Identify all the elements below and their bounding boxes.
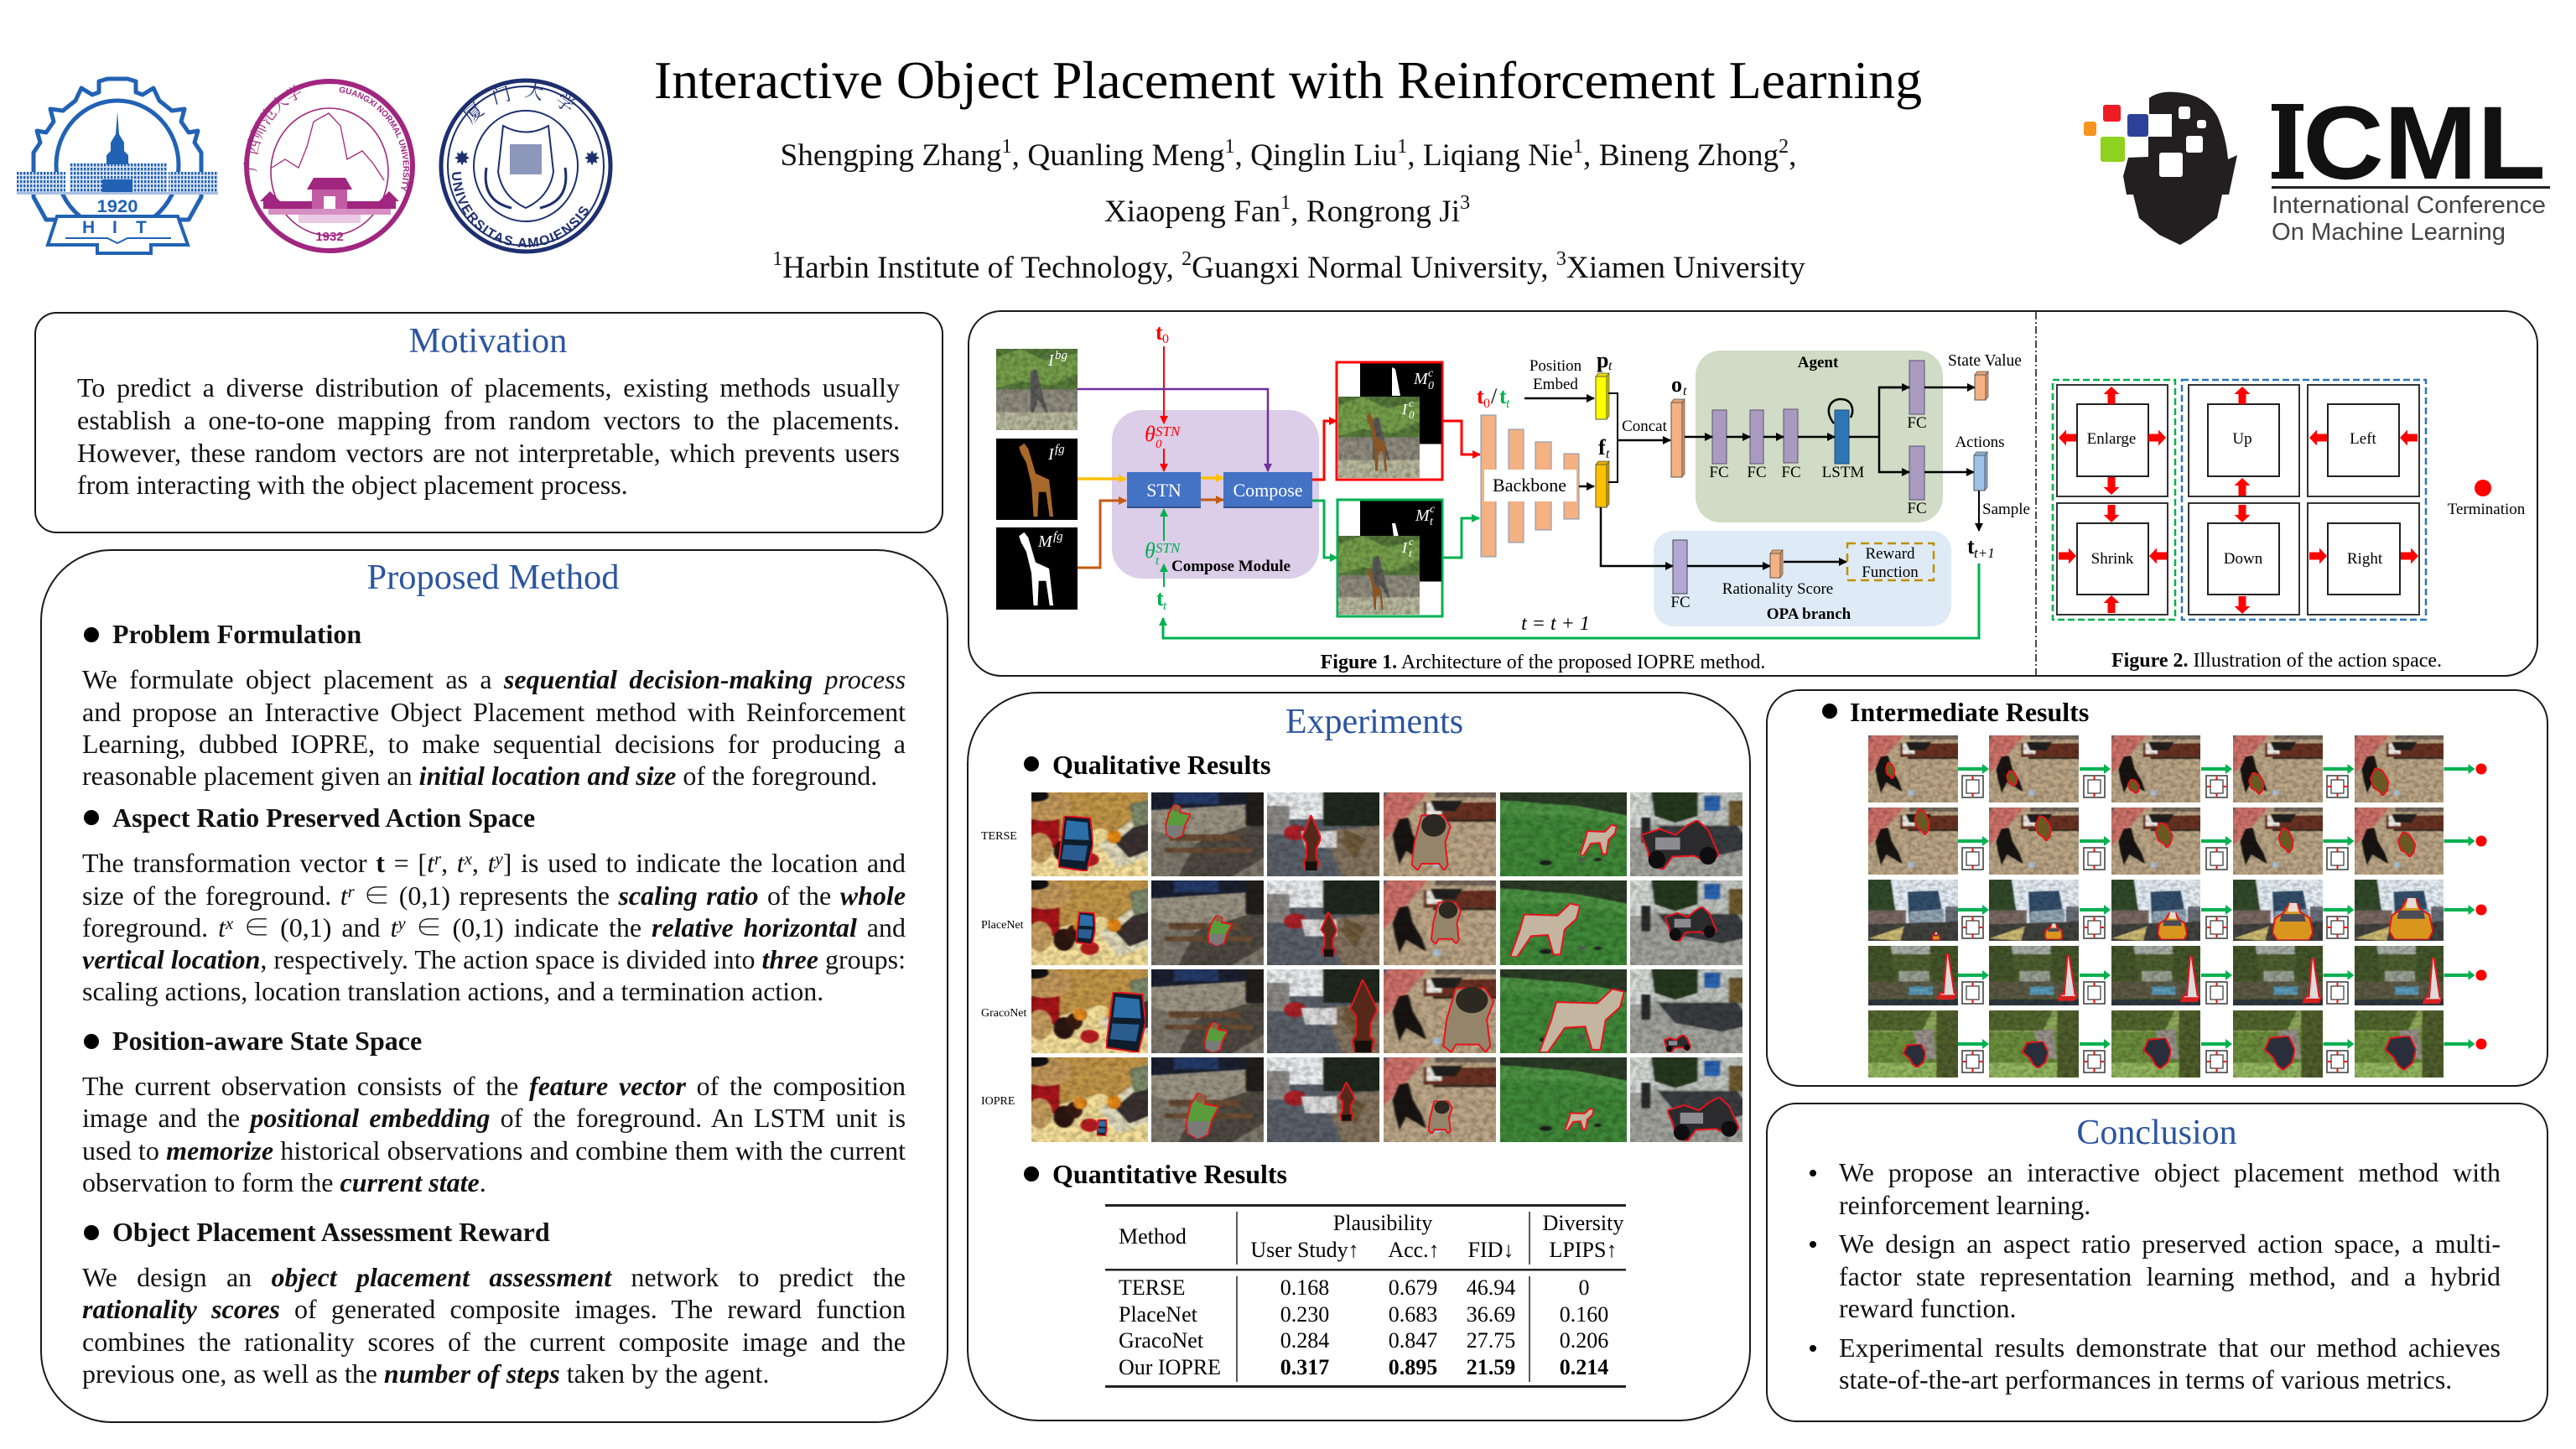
panel: proposed method bbox=[40, 549, 948, 1423]
label: t0/tt: t bbox=[1499, 384, 1507, 408]
affiliations: Xiamen University bbox=[1566, 251, 1805, 285]
text block: problem formulation: reasonable placement given an initial location and size of the foreground. bbox=[82, 760, 877, 790]
logo: Guangxi Normal University: 1932 bbox=[315, 230, 344, 244]
scaling actions group bbox=[2053, 380, 2175, 620]
arrow: mask to STN bbox=[1078, 501, 1126, 568]
composite: initial (red box): c bbox=[1428, 367, 1434, 380]
logo: Xiamen University: 厦门大学 bbox=[463, 83, 575, 124]
logo: ICML bbox=[2084, 86, 2550, 246]
table: quantitative results: 21.59 bbox=[1467, 1355, 1515, 1379]
affiliations: 3 bbox=[1556, 248, 1566, 270]
row labels: PlaceNet bbox=[981, 919, 1024, 932]
table: quantitative results: GracoNet bbox=[1119, 1328, 1204, 1353]
subheading: quantitative results: Quantitative Results bbox=[1052, 1159, 1287, 1189]
panel: figures bbox=[968, 310, 2538, 677]
label: t0/tt: 0 bbox=[1483, 397, 1490, 411]
action: enlarge bbox=[2057, 385, 2168, 496]
arrow: theta t to STN bbox=[1163, 509, 1165, 541]
arrow: STN to Compose orange bbox=[1201, 498, 1223, 501]
text block: conclusion bullet 3: state-of-the-art performances in terms of various metrics. bbox=[1839, 1364, 2452, 1394]
text block: reward: previous one, as well as the number of steps taken by the agent. bbox=[82, 1358, 769, 1389]
output: state value: State Value bbox=[1948, 352, 2022, 370]
qualitative results image grid bbox=[1019, 784, 1753, 1150]
logo: ICML: On Machine Learning bbox=[2272, 219, 2506, 246]
table: quantitative results: LPIPS↑ bbox=[1550, 1238, 1617, 1262]
table: quantitative results: 0.683 bbox=[1389, 1302, 1437, 1327]
authors line 2: Xiaopeng Fan bbox=[1104, 195, 1280, 229]
arrow: initial composite to backbone bbox=[1442, 421, 1480, 454]
label: theta t STN: t bbox=[1156, 554, 1160, 568]
logo: Xiamen University: UNIVERSITAS AMOIENSIS bbox=[452, 172, 589, 248]
label: agent: Agent bbox=[1798, 354, 1839, 371]
action: shrink bbox=[2057, 503, 2168, 615]
agent background bbox=[1696, 351, 1943, 522]
feature bar: ft bbox=[1596, 461, 1609, 507]
text block: state space: used to memorize historical observations and combine them with the current bbox=[82, 1135, 906, 1166]
intermediate row 1 bbox=[1859, 729, 2487, 809]
agent layer labels: FC bbox=[1907, 500, 1927, 517]
label: t0: 0 bbox=[1162, 332, 1169, 346]
LSTM block bbox=[1835, 410, 1849, 464]
arrow: ft to OPA bbox=[1601, 507, 1673, 566]
label: theta0 STN: 0 bbox=[1156, 438, 1162, 451]
table: quantitative results: 36.69 bbox=[1467, 1302, 1515, 1327]
label: compose module: Compose Module bbox=[1171, 558, 1291, 575]
table: quantitative results: Method bbox=[1119, 1224, 1187, 1249]
composite: current (green box): t bbox=[1409, 547, 1412, 559]
backbone network: Backbone bbox=[1493, 475, 1566, 496]
block: STN: STN bbox=[1146, 480, 1182, 501]
label: t t+1 bbox=[1967, 534, 1995, 561]
caption: figure 1: Figure 1. Architecture of the proposed IOPRE method. bbox=[1321, 652, 1765, 673]
text block: action space: vertical location, respectively. The action space is divided into three groups: bbox=[82, 944, 906, 974]
arrow: position to pt bbox=[1524, 397, 1594, 399]
logo: Harbin Institute of Technology: H bbox=[82, 218, 95, 237]
label: position embed: Position bbox=[1530, 357, 1582, 375]
OPA branch background bbox=[1654, 531, 1951, 626]
row labels: IOPRE bbox=[981, 1095, 1015, 1108]
text block: problem formulation: and propose an Interactive Object Placement method with Reinforcement bbox=[82, 696, 906, 726]
table: quantitative results: 27.75 bbox=[1467, 1328, 1515, 1353]
label: theta0 STN bbox=[1145, 422, 1182, 451]
logo: Harbin Institute of Technology bbox=[17, 79, 218, 253]
table: quantitative results: 0.284 bbox=[1280, 1328, 1329, 1353]
table: quantitative results: TERSE bbox=[1119, 1275, 1185, 1300]
intermediate row 2 bbox=[1859, 801, 2487, 881]
text block: reward bbox=[82, 1262, 906, 1389]
label: sample: Sample bbox=[1982, 501, 2030, 518]
label: ft: t bbox=[1606, 447, 1610, 461]
affiliations: Guangxi Normal University, bbox=[1192, 251, 1556, 285]
label: tt bbox=[1156, 586, 1167, 613]
row labels bbox=[981, 830, 1027, 1108]
text block: conclusion bullet 1: reinforcement learning. bbox=[1839, 1190, 2090, 1220]
text block: problem formulation bbox=[82, 664, 906, 791]
authors line 2: 3 bbox=[1460, 192, 1470, 214]
agent layer labels: FC bbox=[1747, 464, 1767, 481]
text block: action space: foreground. tx ∈ (0,1) and ty ∈ (0,1) indicate the relative horizontal and bbox=[82, 912, 906, 943]
text block: problem formulation: Learning, dubbed IOPRE, to make sequential decisions for producing a bbox=[82, 728, 906, 758]
composite: current (green box) bbox=[1330, 500, 1442, 622]
arrow: score to reward bbox=[1784, 561, 1846, 563]
logo: Guangxi Normal University: 广西师范大学 bbox=[243, 85, 301, 172]
logo: Harbin Institute of Technology: 1920 bbox=[97, 197, 138, 216]
authors line 1: 1 bbox=[1002, 136, 1012, 158]
arrow: t0 to theta0 bbox=[1163, 346, 1165, 423]
text block: reward: rationality scores of generated composite images. The reward function bbox=[82, 1294, 906, 1324]
output: state value bbox=[1948, 352, 2022, 400]
intermediate row 4 bbox=[1859, 940, 2487, 1011]
table: quantitative results: 46.94 bbox=[1467, 1275, 1515, 1300]
authors line 1: , Liqiang Nie bbox=[1407, 138, 1573, 173]
text block: state space: image and the positional embedding of the foreground. An LSTM unit is bbox=[82, 1103, 906, 1133]
label: position embed bbox=[1530, 357, 1582, 393]
arrow: foreground to STN bbox=[1078, 477, 1126, 480]
label: t0/tt: / bbox=[1491, 384, 1498, 408]
table: quantitative results: PlaceNet bbox=[1119, 1302, 1198, 1327]
composite: initial (red box) bbox=[1330, 362, 1442, 486]
table: quantitative results: 0.206 bbox=[1560, 1328, 1608, 1353]
label: t0: t bbox=[1156, 320, 1163, 345]
action: right: Right bbox=[2347, 550, 2383, 568]
table: quantitative results: 0.317 bbox=[1280, 1355, 1329, 1379]
arrow: compose to current composite bbox=[1312, 501, 1337, 558]
header: logos, title, authors bbox=[17, 50, 2550, 285]
label: ot bbox=[1671, 372, 1687, 398]
panel: intermediate results bbox=[1766, 689, 2548, 1087]
reward function box: Function bbox=[1862, 564, 1919, 581]
logo: Harbin Institute of Technology: I bbox=[112, 218, 117, 237]
authors line 1: , Bineng Zhong bbox=[1583, 138, 1779, 173]
panel: experiments bbox=[967, 692, 1751, 1421]
table: quantitative results: 0.847 bbox=[1389, 1328, 1437, 1353]
action: shrink: Shrink bbox=[2091, 550, 2134, 568]
panel: motivation bbox=[34, 312, 943, 533]
arrow: actions to next transform bbox=[1978, 491, 1980, 531]
text block: motivation body: establish a one-to-one mapping from random vectors to the placements. bbox=[77, 405, 900, 435]
input image: foreground mask: M bbox=[1037, 532, 1053, 551]
label: theta0 STN: STN bbox=[1156, 423, 1182, 439]
action: termination: Termination bbox=[2448, 501, 2526, 518]
output: actions: Actions bbox=[1955, 434, 2005, 451]
label: t0/tt bbox=[1477, 384, 1510, 411]
agent layer labels: FC bbox=[1781, 464, 1801, 481]
label: ft bbox=[1598, 435, 1610, 461]
logo: ICML: ICML bbox=[2272, 86, 2546, 201]
title: Interactive Object Placement with Reinforcement Learning bbox=[654, 50, 1922, 110]
agent layer labels bbox=[1709, 414, 1927, 517]
agent arrows bbox=[1685, 387, 1975, 472]
logo: ICML: International Conference bbox=[2272, 192, 2546, 219]
label: theta t STN bbox=[1145, 538, 1182, 568]
authors line 1: 1 bbox=[1224, 136, 1234, 158]
arrow: FC to score bbox=[1687, 565, 1770, 567]
composite: initial (red box): 0 bbox=[1409, 408, 1415, 421]
text block: state space: observation to form the current state. bbox=[82, 1167, 486, 1197]
table: quantitative results bbox=[1105, 1204, 1626, 1388]
logo: Guangxi Normal University: GUANGXI NORMAL UNIVERSITY bbox=[339, 87, 409, 191]
label: t = t + 1: t = t + 1 bbox=[1521, 613, 1590, 635]
FC layers in agent bbox=[1712, 361, 1924, 500]
arrow: background to compose bbox=[1078, 389, 1268, 471]
text block: problem formulation: We formulate object placement as a sequential decision-making process bbox=[82, 664, 906, 694]
authors line 2: 1 bbox=[1280, 192, 1291, 214]
action: down bbox=[2189, 503, 2299, 615]
input image: foreground bbox=[996, 439, 1078, 520]
input image: foreground: fg bbox=[1055, 443, 1065, 456]
logo: Xiamen University: ✸ bbox=[584, 148, 600, 170]
figure 2: action space bbox=[2053, 380, 2526, 620]
panel: conclusion bbox=[1766, 1103, 2548, 1422]
label: concat: Concat bbox=[1622, 418, 1668, 435]
label: t t+1: t bbox=[1967, 534, 1975, 558]
table: quantitative results: 0.895 bbox=[1389, 1355, 1437, 1379]
text block: motivation body bbox=[77, 372, 900, 500]
table: quantitative results: FID↓ bbox=[1468, 1238, 1514, 1262]
authors line 1: , Quanling Meng bbox=[1012, 138, 1224, 173]
authors line 1: , bbox=[1789, 138, 1796, 173]
label: t0/tt: t bbox=[1506, 397, 1510, 411]
composite: current (green box): M bbox=[1415, 506, 1431, 525]
OPA FC layer bbox=[1670, 540, 1690, 611]
OPA FC layer: FC bbox=[1670, 594, 1690, 611]
label: pt: t bbox=[1608, 359, 1613, 373]
table: quantitative results: User Study↑ bbox=[1250, 1238, 1359, 1262]
logo: Guangxi Normal University bbox=[243, 79, 415, 253]
table: quantitative results: Plausibility bbox=[1333, 1211, 1432, 1235]
label: t t+1: t+1 bbox=[1974, 545, 1995, 561]
affiliations: 2 bbox=[1182, 248, 1192, 270]
arrow: current composite to backbone bbox=[1442, 518, 1479, 558]
text block: conclusion bullet 2: We design an aspect ratio preserved action space, a multi- bbox=[1839, 1228, 2501, 1259]
LSTM recurrent loop bbox=[1829, 399, 1852, 423]
heading: motivation: Motivation bbox=[409, 321, 567, 361]
connector: pt and ft to concat bbox=[1608, 393, 1618, 482]
action: left bbox=[2308, 385, 2419, 496]
input image: background bbox=[988, 340, 1086, 439]
label: OPA branch: OPA branch bbox=[1767, 605, 1852, 623]
authors line 1: Shengping Zhang bbox=[781, 138, 1002, 173]
arrow: concat bbox=[1618, 439, 1670, 441]
arrow: t+1 feedback loop bbox=[1163, 564, 1979, 638]
label: tt: t bbox=[1156, 586, 1164, 610]
text block: action space: The transformation vector t = [tr, tx, ty] is used to indicate the location and bbox=[82, 848, 906, 878]
input image: background: bg bbox=[1055, 349, 1068, 362]
arrow: theta0 to STN bbox=[1163, 449, 1165, 471]
figure 1: architecture diagram bbox=[988, 320, 2030, 638]
row labels: TERSE bbox=[981, 830, 1017, 843]
text block: action space: size of the foreground. tr ∈ (0,1) represents the scaling ratio of the whole bbox=[82, 880, 906, 911]
agent layer labels: FC bbox=[1907, 414, 1927, 432]
label: theta t STN: θ bbox=[1145, 538, 1156, 563]
arrow: compose to initial composite bbox=[1312, 421, 1337, 480]
block: Compose bbox=[1223, 472, 1312, 508]
subheading: object placement assessment reward: Object Placement Assessment Reward bbox=[112, 1216, 550, 1246]
text block: state space: The current observation consists of the feature vector of the composition bbox=[82, 1071, 906, 1101]
text block: conclusion bullet 1: We propose an interactive object placement method with bbox=[1839, 1157, 2501, 1187]
composite: current (green box): I bbox=[1401, 539, 1408, 556]
text block: motivation body: However, these random vectors are not interpretable, which prevents users bbox=[77, 438, 900, 468]
backbone network bbox=[1481, 415, 1579, 557]
row TERSE images bbox=[1019, 784, 1753, 885]
composite: initial (red box): c bbox=[1409, 397, 1414, 409]
authors line 1: , Qinglin Liu bbox=[1234, 138, 1398, 173]
text block: reward: We design an object placement assessment network to predict the bbox=[82, 1262, 906, 1292]
affiliations: Harbin Institute of Technology, bbox=[782, 251, 1182, 285]
label: tt: t bbox=[1163, 600, 1167, 613]
composite: current (green box): c bbox=[1409, 535, 1414, 548]
heading: experiments: Experiments bbox=[1285, 703, 1463, 741]
feature bar: ot bbox=[1671, 399, 1685, 477]
subheading: qualitative results: Qualitative Results bbox=[1052, 750, 1270, 780]
row GracoNet images bbox=[1019, 961, 1753, 1062]
agent layer labels: FC bbox=[1709, 464, 1729, 481]
composite: current (green box): c bbox=[1430, 503, 1436, 516]
label: position embed: Embed bbox=[1533, 376, 1578, 393]
logo: Harbin Institute of Technology: T bbox=[136, 218, 147, 237]
subheading: position-aware state space: Position-aware State Space bbox=[112, 1026, 422, 1056]
composite: initial (red box): M bbox=[1413, 370, 1429, 388]
composite: initial (red box): 0 bbox=[1428, 380, 1434, 392]
text block: conclusion bullet 2 bbox=[1810, 1228, 2501, 1323]
action: right bbox=[2308, 503, 2419, 615]
table: quantitative results: 0.168 bbox=[1280, 1275, 1329, 1300]
input image: foreground: I bbox=[1047, 445, 1055, 464]
arrow: tt to theta t bbox=[1163, 564, 1165, 587]
subheading: problem formulation: Problem Formulation bbox=[112, 619, 361, 649]
text block: motivation body: from interacting with the object placement process. bbox=[77, 470, 628, 500]
reward function box: Reward bbox=[1865, 545, 1915, 563]
text block: conclusion bullet 2: reward function. bbox=[1839, 1293, 2016, 1323]
composite: initial (red box): I bbox=[1401, 401, 1408, 418]
rationality score bar: Rationality Score bbox=[1722, 580, 1833, 598]
text block: conclusion bullet 1 bbox=[1810, 1157, 2501, 1220]
label: pt: p bbox=[1597, 348, 1608, 372]
row labels: GracoNet bbox=[981, 1007, 1027, 1020]
rationality score bar bbox=[1722, 550, 1833, 598]
action: left: Left bbox=[2350, 430, 2377, 448]
compose module background bbox=[1112, 410, 1319, 579]
action: termination bbox=[2448, 480, 2526, 518]
arrow: STN to Compose yellow bbox=[1201, 476, 1223, 480]
subheading: aspect ratio preserved action space: Aspect Ratio Preserved Action Space bbox=[112, 802, 535, 833]
logo: Xiamen University bbox=[439, 79, 612, 253]
authors line 1: 2 bbox=[1779, 136, 1789, 158]
label: t0/tt: t bbox=[1477, 384, 1484, 408]
input image: foreground mask: fg bbox=[1053, 530, 1063, 543]
feature bar: pt bbox=[1596, 373, 1609, 419]
agent layer labels: LSTM bbox=[1822, 464, 1864, 481]
affiliations: 1 bbox=[772, 248, 782, 270]
logo: Xiamen University: ✸ bbox=[454, 148, 470, 170]
action: enlarge: Enlarge bbox=[2087, 430, 2136, 448]
label: ot: o bbox=[1671, 372, 1682, 397]
label: theta0 STN: θ bbox=[1145, 422, 1156, 446]
output: actions bbox=[1955, 434, 2005, 491]
table: quantitative results: 0 bbox=[1578, 1275, 1590, 1300]
translation actions group bbox=[2182, 380, 2426, 620]
text block: action space: scaling actions, location translation actions, and a termination action. bbox=[82, 976, 823, 1006]
authors line 1: 1 bbox=[1573, 136, 1583, 158]
heading: conclusion: Conclusion bbox=[2076, 1114, 2237, 1152]
caption: figure 2: Figure 2. Illustration of the action space. bbox=[2111, 650, 2442, 672]
intermediate row 3 bbox=[1859, 874, 2487, 947]
intermediate row 5 bbox=[1859, 1004, 2487, 1084]
input image: background: I bbox=[1047, 351, 1055, 370]
heading: proposed method: Proposed Method bbox=[366, 557, 620, 597]
action: down: Down bbox=[2224, 550, 2263, 568]
table: quantitative results: 0.679 bbox=[1389, 1275, 1437, 1300]
text block: action space bbox=[82, 848, 906, 1006]
table: quantitative results: 0.160 bbox=[1560, 1302, 1608, 1327]
composite: current (green box): t bbox=[1430, 516, 1434, 528]
text block: conclusion bullet 3: Experimental results demonstrate that our method achieves bbox=[1839, 1332, 2501, 1363]
table: quantitative results: 0.214 bbox=[1560, 1355, 1608, 1379]
authors line 2: , Rongrong Ji bbox=[1291, 195, 1460, 229]
label: ft: f bbox=[1598, 435, 1606, 460]
block: Compose: Compose bbox=[1233, 480, 1303, 501]
label: t0 bbox=[1156, 320, 1169, 346]
authors line 1: 1 bbox=[1397, 136, 1407, 158]
text block: conclusion bullet 3 bbox=[1810, 1332, 2501, 1394]
table: quantitative results: 0.230 bbox=[1280, 1302, 1329, 1327]
input image: foreground mask bbox=[996, 527, 1078, 610]
arrow: backbone to ft bbox=[1579, 486, 1594, 487]
block: STN bbox=[1127, 472, 1201, 508]
row PlaceNet images bbox=[1019, 872, 1753, 974]
subheading: intermediate results: Intermediate Results bbox=[1850, 697, 2089, 727]
label: ot: t bbox=[1683, 384, 1687, 398]
row IOPRE images bbox=[1019, 1049, 1753, 1150]
text block: motivation body: To predict a diverse distribution of placements, existing methods usually bbox=[77, 372, 900, 402]
table: quantitative results: Our IOPRE bbox=[1119, 1355, 1221, 1379]
text block: reward: combines the rationality scores of the current composite image and the bbox=[82, 1327, 906, 1357]
text block: conclusion bullet 2: factor state representation learning method, and a hybrid bbox=[1839, 1261, 2501, 1291]
action: up bbox=[2189, 385, 2299, 496]
table: quantitative results: Diversity bbox=[1543, 1211, 1623, 1235]
reward function box bbox=[1847, 543, 1934, 581]
text block: state space bbox=[82, 1071, 906, 1197]
action: up: Up bbox=[2232, 430, 2252, 448]
label: theta t STN: STN bbox=[1156, 540, 1182, 556]
table: quantitative results: Acc.↑ bbox=[1388, 1238, 1440, 1262]
